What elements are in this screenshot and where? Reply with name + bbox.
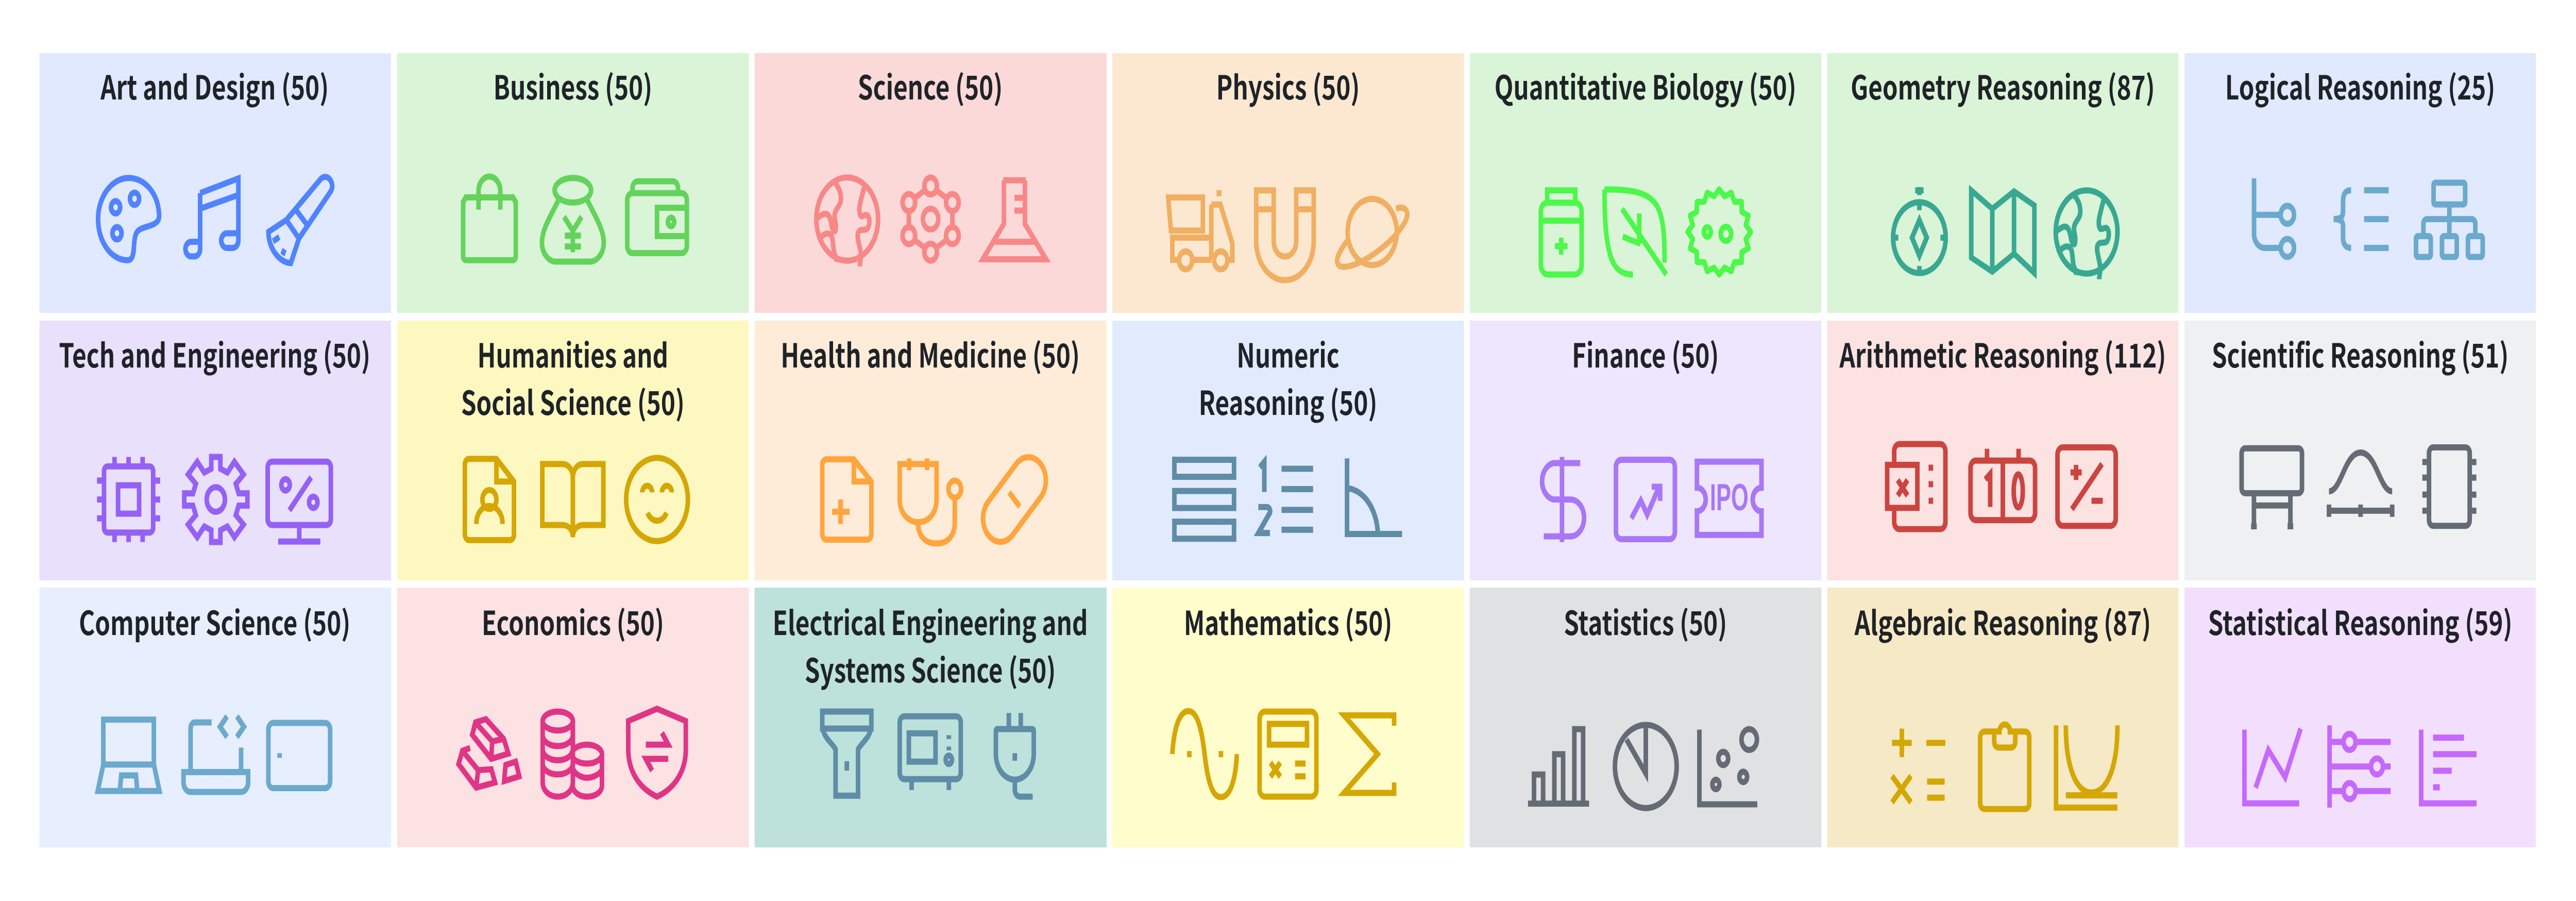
heading: Electrical Engineering and Systems Science: Systems Science (50): [805, 645, 1056, 692]
icon: horizontal bar chart: [2421, 730, 2477, 804]
icon: whiteboard on stand: [2242, 448, 2302, 526]
icon: flashlight: [822, 712, 871, 796]
panel: Geometry Reasoning: [1827, 53, 2178, 313]
icon: plus minus box: [2058, 447, 2116, 526]
heading: Economics: Economics (50): [482, 597, 664, 645]
heading: Logical Reasoning: Logical Reasoning (25): [2225, 62, 2495, 109]
panel: Quantitative Biology: [1470, 53, 1821, 313]
icon: stacked rows: [1174, 460, 1234, 539]
icon: shopping bag: [463, 177, 516, 260]
heading: Finance: Finance (50): [1572, 330, 1719, 377]
panel: Humanities and Social Science: [397, 321, 749, 580]
icon: flask: [983, 180, 1046, 259]
panel: Finance: [1470, 321, 1821, 580]
icon: gold bars: [459, 719, 519, 788]
icon: bell curve: [2329, 453, 2392, 517]
icon: flip counter 10: [1971, 449, 2035, 520]
icon: branching tree: [2254, 178, 2294, 257]
heading: Humanities and Social Science: Humanities and: [478, 330, 668, 377]
icon: microwave: [900, 716, 961, 790]
heading: Science: Science (50): [858, 62, 1003, 109]
panel: Arithmetic Reasoning: [1827, 321, 2178, 580]
panel: Art and Design: [40, 53, 391, 313]
icon: map: [1971, 190, 2035, 273]
panel: Business: [397, 53, 749, 313]
icon: open book: [543, 464, 603, 537]
panel: Tech and Engineering: [40, 321, 391, 580]
icon: IPO ticket: IPO: [1710, 476, 1749, 519]
icon: laptop: [98, 720, 160, 791]
heading: Quantitative Biology: Quantitative Biology (50): [1495, 62, 1797, 109]
heading: Humanities and Social Science: Social Science (50): [461, 377, 685, 425]
icon: laptop with code: [183, 716, 248, 792]
icon: magnet: [1256, 190, 1314, 280]
icon: pill: [983, 457, 1046, 542]
heading: Numeric Reasoning: Numeric: [1236, 330, 1340, 377]
heading: Physics: Physics (50): [1216, 62, 1360, 109]
icon: molecule: [903, 177, 959, 261]
heading: Computer Science: Computer Science (50): [79, 597, 350, 645]
icon: file with plus: [822, 459, 871, 540]
heading: Arithmetic Reasoning: Arithmetic Reasoning (112): [1839, 330, 2166, 377]
icon: right angle: [1347, 458, 1402, 534]
heading: Statistics: Statistics (50): [1564, 597, 1727, 645]
heading: Mathematics: Mathematics (50): [1184, 597, 1392, 645]
icon: rising chart: [1616, 460, 1675, 539]
icon: bar chart: [1528, 729, 1589, 804]
icon: file with user: [465, 459, 514, 540]
panel: Scientific Reasoning: [2184, 321, 2536, 580]
icon: clipboard: [1980, 724, 2029, 809]
heading: Business: Business (50): [494, 62, 652, 109]
heading: Health and Medicine: Health and Medicine (50): [781, 330, 1080, 377]
heading: Numeric Reasoning: Reasoning (50): [1199, 377, 1377, 425]
heading: Statistical Reasoning: Statistical Reasoning (59): [2208, 597, 2512, 645]
icon: sigma: [1344, 715, 1394, 793]
icon: virus cell: [1688, 190, 1751, 275]
icon: music note: [185, 178, 239, 256]
icon: calculator: [1260, 712, 1316, 797]
icon: medicine bottle: [1541, 190, 1582, 275]
heading: Electrical Engineering and Systems Science: Electrical Engineering and: [773, 597, 1088, 645]
icon: math operators: [1892, 729, 1945, 803]
icon: monitor with percent: [268, 462, 331, 542]
icon: dump truck: [1168, 193, 1232, 269]
panel: Logical Reasoning: [2184, 53, 2536, 313]
icon: dollar sign: [1542, 457, 1584, 542]
icon: globe: [816, 177, 878, 266]
icon: leaf: [1604, 190, 1666, 275]
icon: stethoscope: [900, 458, 961, 543]
icon: tablet: [268, 723, 330, 788]
heading: Art and Design: Art and Design (50): [100, 62, 329, 109]
heading: Algebraic Reasoning: Algebraic Reasoning (87): [1854, 597, 2151, 645]
icon: IPO ticket: [1697, 462, 1761, 535]
icon: sitemap: [2416, 182, 2483, 257]
icon: scatter plot: [1699, 729, 1757, 804]
panel: Algebraic Reasoning: [1827, 588, 2178, 847]
panel: Health and Medicine: [755, 321, 1107, 580]
panel: Numeric Reasoning: [1112, 321, 1464, 580]
panel: Economics: [397, 588, 749, 847]
icon: shield with exchange arrows: [628, 709, 686, 797]
icon: parabola graph: [2056, 725, 2117, 808]
icon: yen money bag: [542, 178, 604, 262]
heading: Scientific Reasoning: Scientific Reasoning (51): [2212, 330, 2509, 377]
icon: wallet: [627, 181, 687, 253]
panel: Statistics: [1470, 588, 1821, 847]
heading: Geometry Reasoning: Geometry Reasoning (87): [1851, 62, 2155, 109]
icon: plug: [996, 713, 1034, 797]
icon: pie chart: [1615, 725, 1676, 808]
icon: list tree: [2333, 190, 2388, 248]
icon: compass: [1893, 187, 1946, 273]
icon: brush: [268, 177, 332, 263]
icon: globe: [2056, 190, 2117, 279]
icon: palette: [98, 178, 159, 260]
icon: planet: [1337, 199, 1408, 267]
panel: Electrical Engineering and Systems Science: [755, 588, 1107, 847]
icon: gear: [184, 457, 247, 542]
panel: Mathematics: [1112, 588, 1464, 847]
icon: smiley: [626, 458, 688, 541]
icon: coin stacks: [543, 712, 602, 797]
icon: sliders: [2330, 725, 2391, 808]
panel: Statistical Reasoning: [2184, 588, 2536, 847]
icon: microchip: [2422, 447, 2477, 526]
icon: line chart: [2244, 729, 2300, 804]
icon: calculator with multiply: [1887, 444, 1945, 529]
icon: cpu chip: [97, 457, 160, 542]
panel: Computer Science: [40, 588, 391, 847]
panel: Science: [755, 53, 1107, 313]
heading: Tech and Engineering: Tech and Engineering (50): [59, 330, 370, 377]
icon: sine wave: [1172, 711, 1237, 797]
icon: numbered list: [1258, 462, 1313, 533]
panel: Physics: [1112, 53, 1464, 313]
